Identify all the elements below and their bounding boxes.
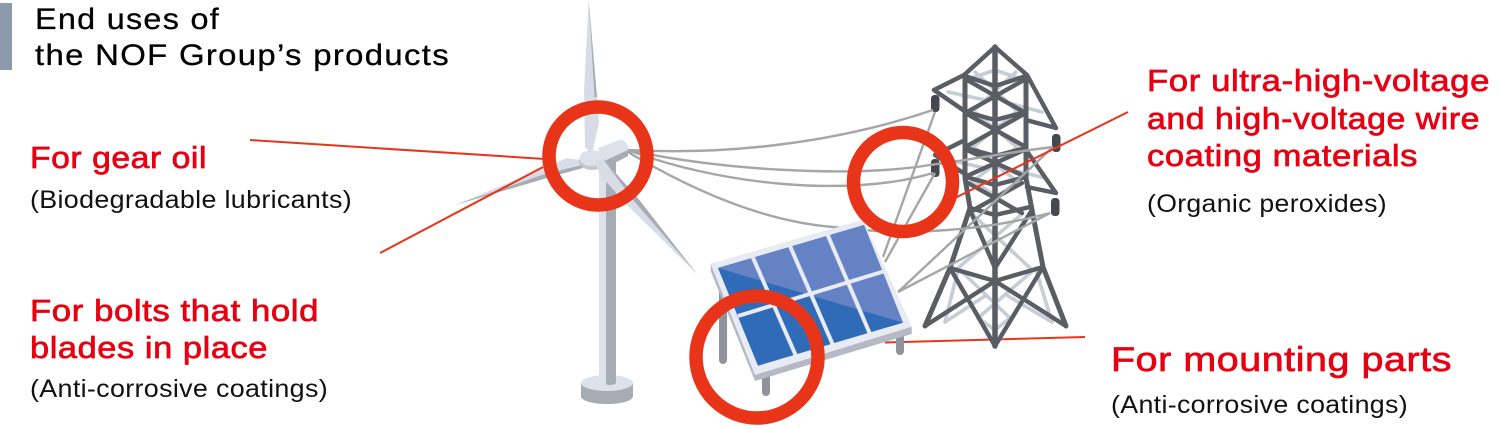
label: wire coating: and high-voltage wire — [1147, 101, 1480, 136]
panel legs — [723, 290, 900, 392]
panel grid — [738, 235, 885, 356]
title: End uses of — [35, 3, 220, 36]
insulators — [931, 95, 1060, 216]
hub — [579, 152, 605, 170]
label: wire coating: For ultra-high-voltage — [1147, 63, 1490, 98]
turbine nacelle — [598, 140, 628, 167]
tower front lattice — [925, 47, 1066, 346]
icon: solar panel — [711, 220, 912, 392]
highlight ring: wires — [854, 132, 952, 232]
panel glass — [718, 225, 903, 366]
label: gear oil: (Biodegradable lubricants) — [30, 186, 352, 214]
label: bolts: (Anti-corrosive coatings) — [30, 375, 328, 403]
blade: top — [584, 0, 599, 152]
turbine tower — [599, 160, 606, 384]
leader line: mounting parts — [885, 337, 1085, 342]
turbine base — [581, 383, 633, 404]
label: wire coating — [1147, 63, 1490, 218]
title: the NOF Group’s products — [35, 39, 450, 72]
highlight ring: nacelle — [549, 107, 647, 205]
label: mounting parts — [1111, 341, 1452, 419]
icon: wind turbine — [455, 0, 697, 404]
blade: lower right — [595, 159, 697, 274]
highlight ring: mounting parts — [696, 296, 818, 418]
label: bolts: For bolts that hold — [30, 293, 319, 328]
leader lines: turbine — [250, 140, 545, 253]
label: wire coating: coating materials — [1147, 138, 1418, 173]
title — [35, 3, 450, 72]
tower rear lattice — [945, 70, 1052, 330]
icon: power cables — [628, 110, 1053, 292]
label: bolts — [30, 293, 328, 403]
panel frame — [711, 220, 912, 381]
heading accent bar — [0, 3, 12, 70]
label: mounting parts: (Anti-corrosive coatings) — [1111, 391, 1408, 419]
label: gear oil: For gear oil — [30, 140, 207, 175]
label: wire coating: (Organic peroxides) — [1147, 190, 1387, 218]
leader line: wire coating — [955, 112, 1128, 198]
label: mounting parts: For mounting parts — [1111, 341, 1452, 379]
label: bolts: blades in place — [30, 330, 268, 365]
label: gear oil — [30, 140, 352, 214]
blade: left — [455, 158, 583, 205]
icon: transmission tower — [925, 47, 1066, 346]
